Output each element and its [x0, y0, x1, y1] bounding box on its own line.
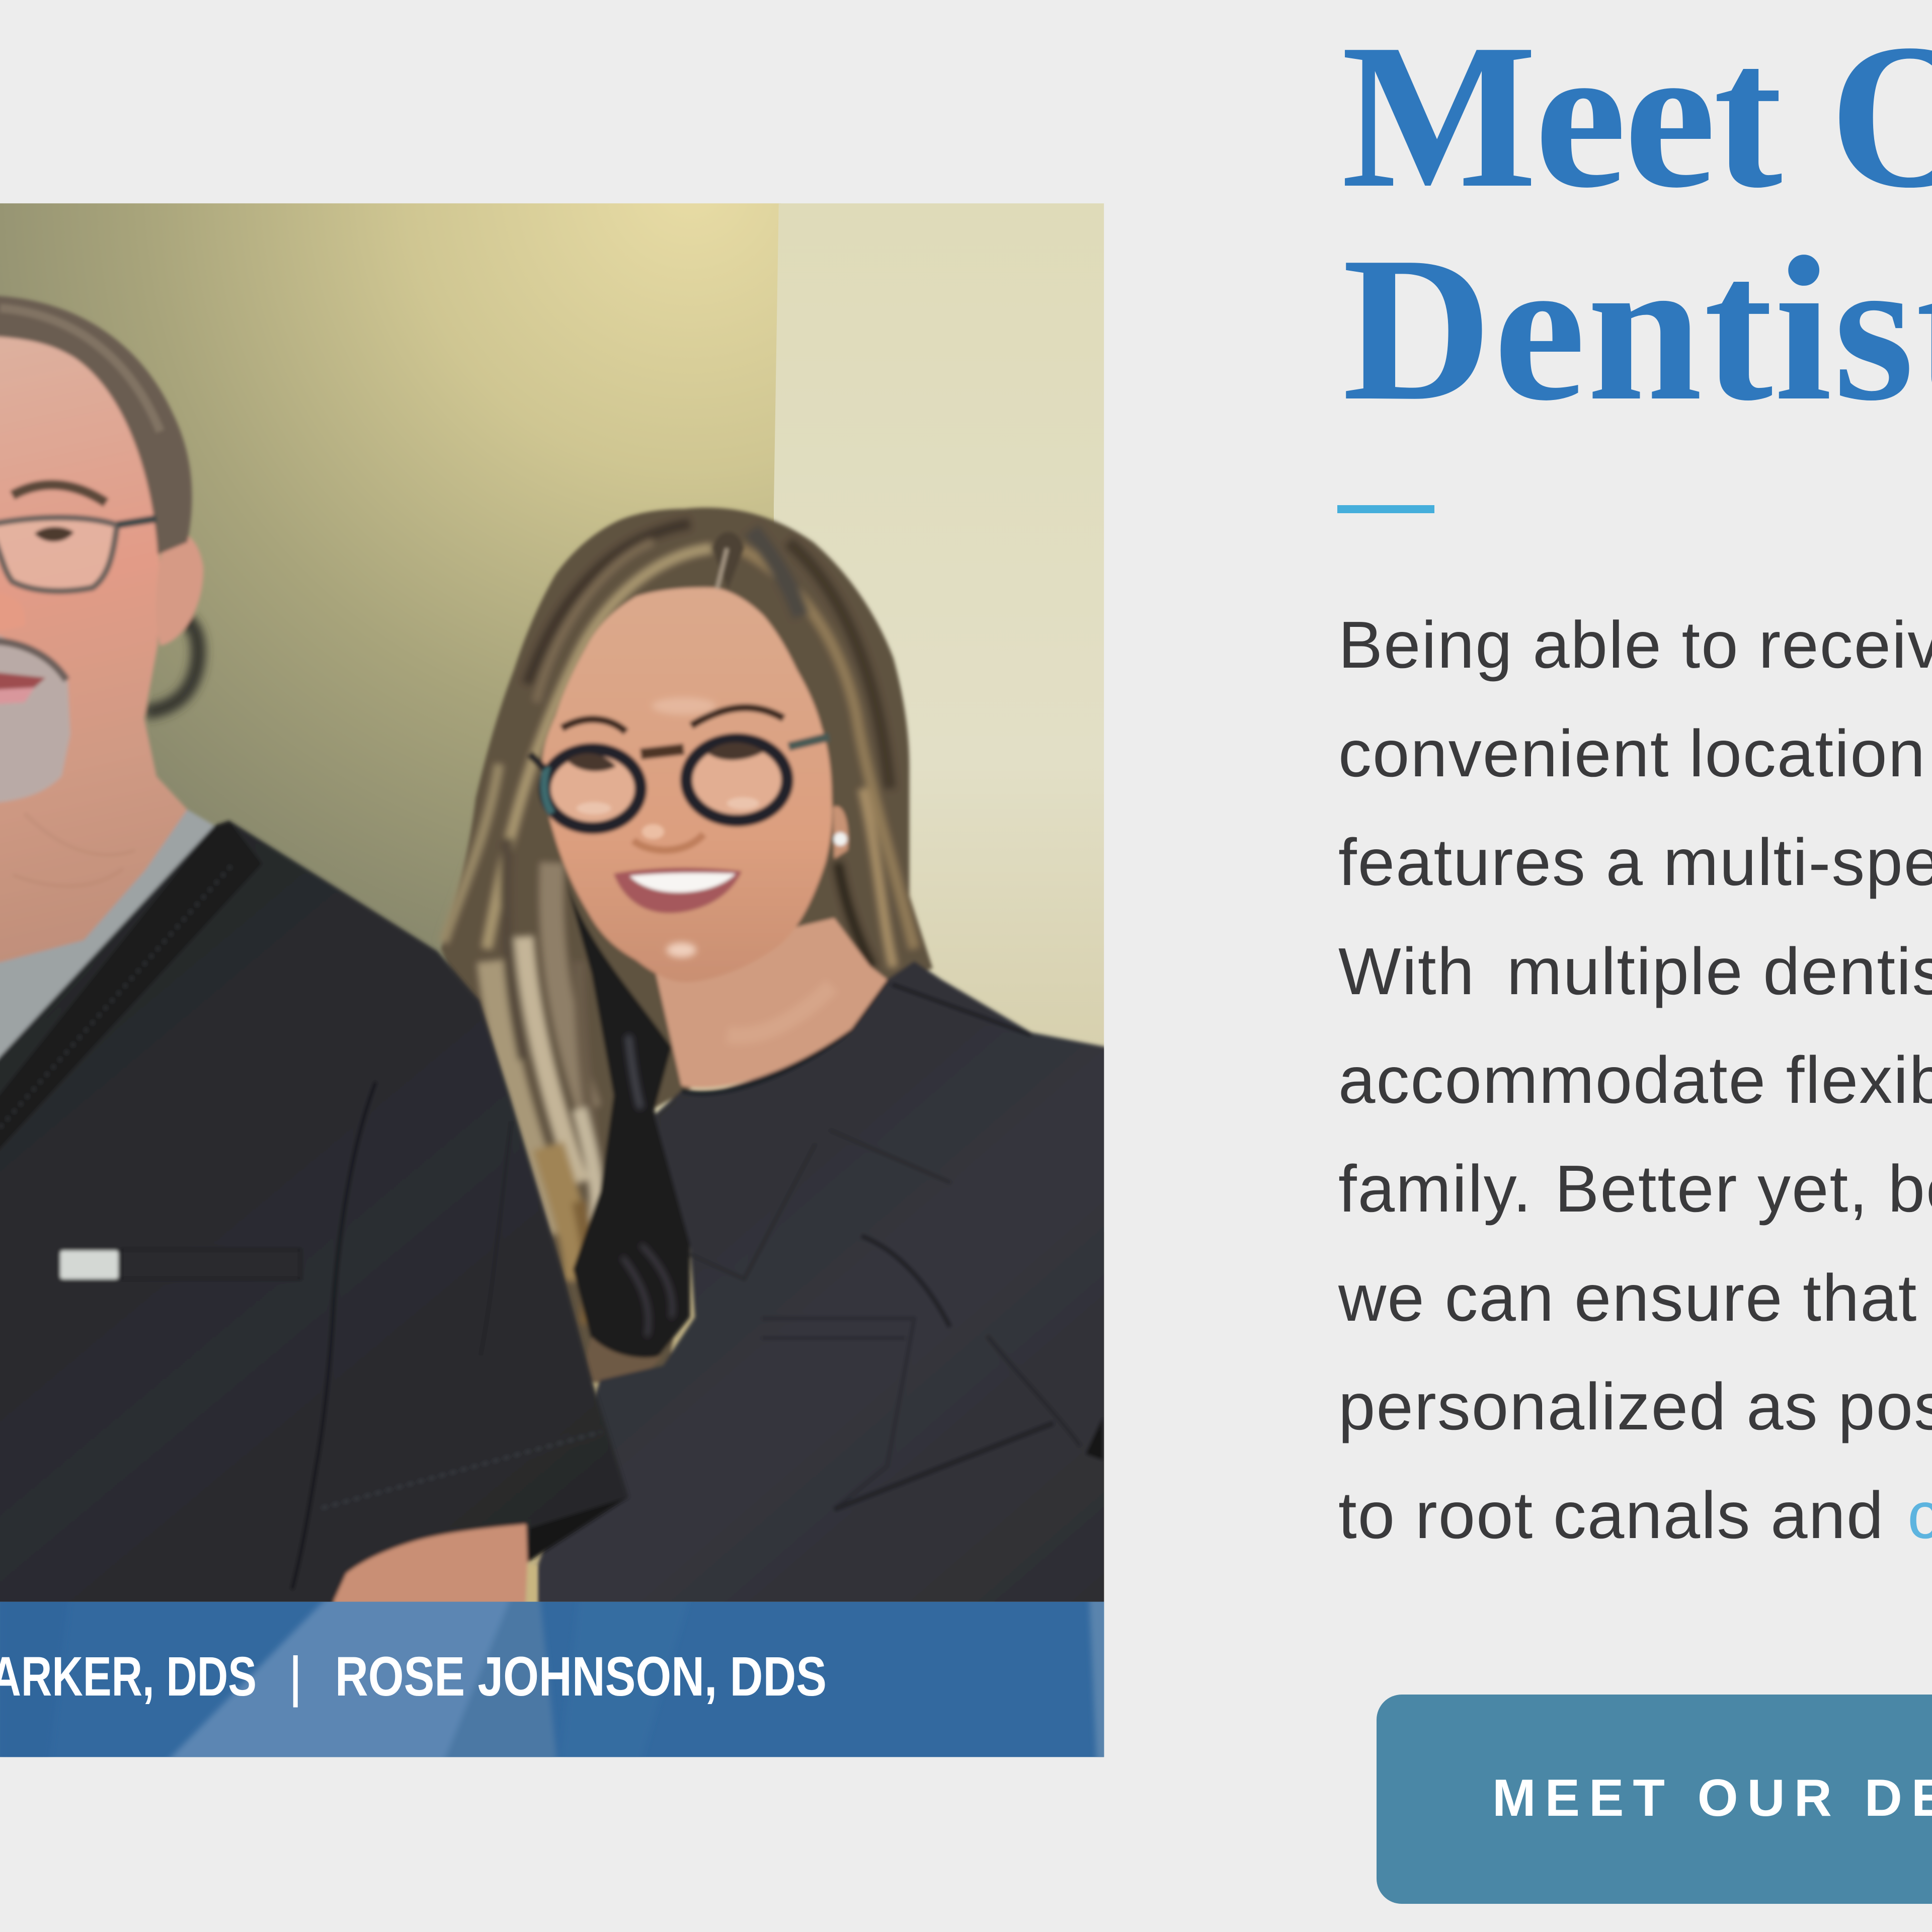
man: hair — [0, 295, 192, 554]
caption bar — [0, 1595, 1109, 1762]
heading — [1341, 2, 1932, 444]
man: scrub top — [0, 821, 628, 1639]
body paragraph: convenient location — [1338, 716, 1926, 790]
body paragraph — [1338, 608, 1932, 1552]
body paragraph: we can ensure that — [1338, 1261, 1917, 1335]
man: grey tee — [0, 810, 214, 1097]
caption text: ROSE JOHNSON, DDS — [335, 1646, 827, 1708]
man: pocket — [121, 1249, 301, 1279]
man: arm — [330, 1524, 527, 1639]
woman: dentist on the right — [441, 508, 1134, 1639]
woman: neck — [653, 918, 887, 1088]
heading accent rule — [1337, 505, 1434, 513]
man: beard — [0, 636, 70, 804]
man: glasses — [0, 518, 117, 591]
man: name badge — [60, 1251, 118, 1279]
man: brow — [12, 485, 106, 503]
call to action button — [1377, 1695, 1932, 1904]
woman: dark hair ends — [560, 862, 690, 1360]
woman: hair strands — [444, 524, 914, 1325]
man: skin of face and neck — [0, 308, 187, 974]
caption text: | — [288, 1646, 303, 1708]
photo wall background — [0, 203, 1109, 1602]
man: ear — [155, 533, 203, 646]
woman: scrub top — [537, 961, 1134, 1639]
man: dentist on the left — [0, 295, 628, 1639]
woman: glasses — [544, 749, 640, 828]
woman: smile — [614, 868, 742, 913]
panel: team photo — [0, 203, 1134, 1762]
woman: nose — [633, 834, 703, 850]
man: nose — [0, 592, 25, 633]
caption text — [0, 1646, 827, 1708]
man: sleeve seam and hem — [292, 1082, 376, 1589]
woman: face — [542, 588, 832, 982]
woman: brows — [562, 719, 626, 732]
